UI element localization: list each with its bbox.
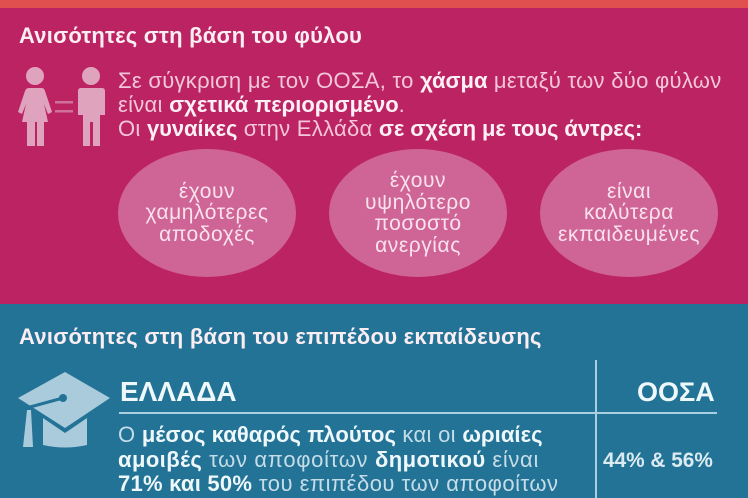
bubble: higher unemployment: υψηλότερο xyxy=(365,190,471,214)
bubble: better educated: καλύτερα xyxy=(584,201,674,224)
text block: Greece wealth and wages: αμοιβές των αποφοίτων δημοτικού είναι xyxy=(118,446,539,472)
text block: Greece wealth and wages: Ο μέσος καθαρός πλούτος και οι ωριαίες xyxy=(118,422,543,447)
column heading: Greece: ΕΛΛΑΔΑ xyxy=(120,376,237,407)
text block: gender gap: Οι γυναίκες στην Ελλάδα σε σχέση με τους άντρες: xyxy=(118,116,642,141)
value: OECD percentages: 44% & 56% xyxy=(603,449,713,472)
bubble: higher unemployment: ποσοστό xyxy=(374,212,462,235)
panel: education inequalities xyxy=(0,304,748,498)
bubble: lower earnings xyxy=(118,149,296,277)
text block: Greece wealth and wages xyxy=(118,422,559,496)
bubble: better educated: εκπαιδευμένες xyxy=(558,223,700,246)
text block: gender gap: είναι σχετικά περιορισμένο. xyxy=(118,92,405,117)
text block: gender gap xyxy=(118,68,722,141)
bubble: lower earnings: έχουν xyxy=(179,180,235,203)
text block: gender gap: Σε σύγκριση με τον ΟΟΣΑ, το χάσμα μεταξύ των δύο φύλων xyxy=(118,68,722,93)
table vertical rule xyxy=(595,360,597,498)
bubble: higher unemployment: έχουν xyxy=(390,169,446,192)
icon: graduation cap xyxy=(18,372,110,448)
bubble: better educated xyxy=(540,149,718,277)
bubble: lower earnings: αποδοχές xyxy=(159,223,255,246)
bubble: higher unemployment: ανεργίας xyxy=(375,234,461,256)
column heading: OECD: ΟΟΣΑ xyxy=(637,377,715,407)
panel: gender inequalities xyxy=(0,8,748,304)
heading: gender: Ανισότητες στη βάση του φύλου xyxy=(19,23,362,48)
heading: education: Ανισότητες στη βάση του επιπέδου εκπαίδευσης xyxy=(19,324,542,349)
bubble: higher unemployment xyxy=(329,149,507,277)
icon: woman and man with equals sign xyxy=(18,67,105,146)
text block: Greece wealth and wages: 71% και 50% του επιπέδου των αποφοίτων xyxy=(118,471,559,496)
table horizontal rule xyxy=(119,412,717,414)
bubble: better educated: είναι xyxy=(607,180,651,203)
top accent bar xyxy=(0,0,748,8)
bubble: lower earnings: χαμηλότερες xyxy=(145,201,269,224)
